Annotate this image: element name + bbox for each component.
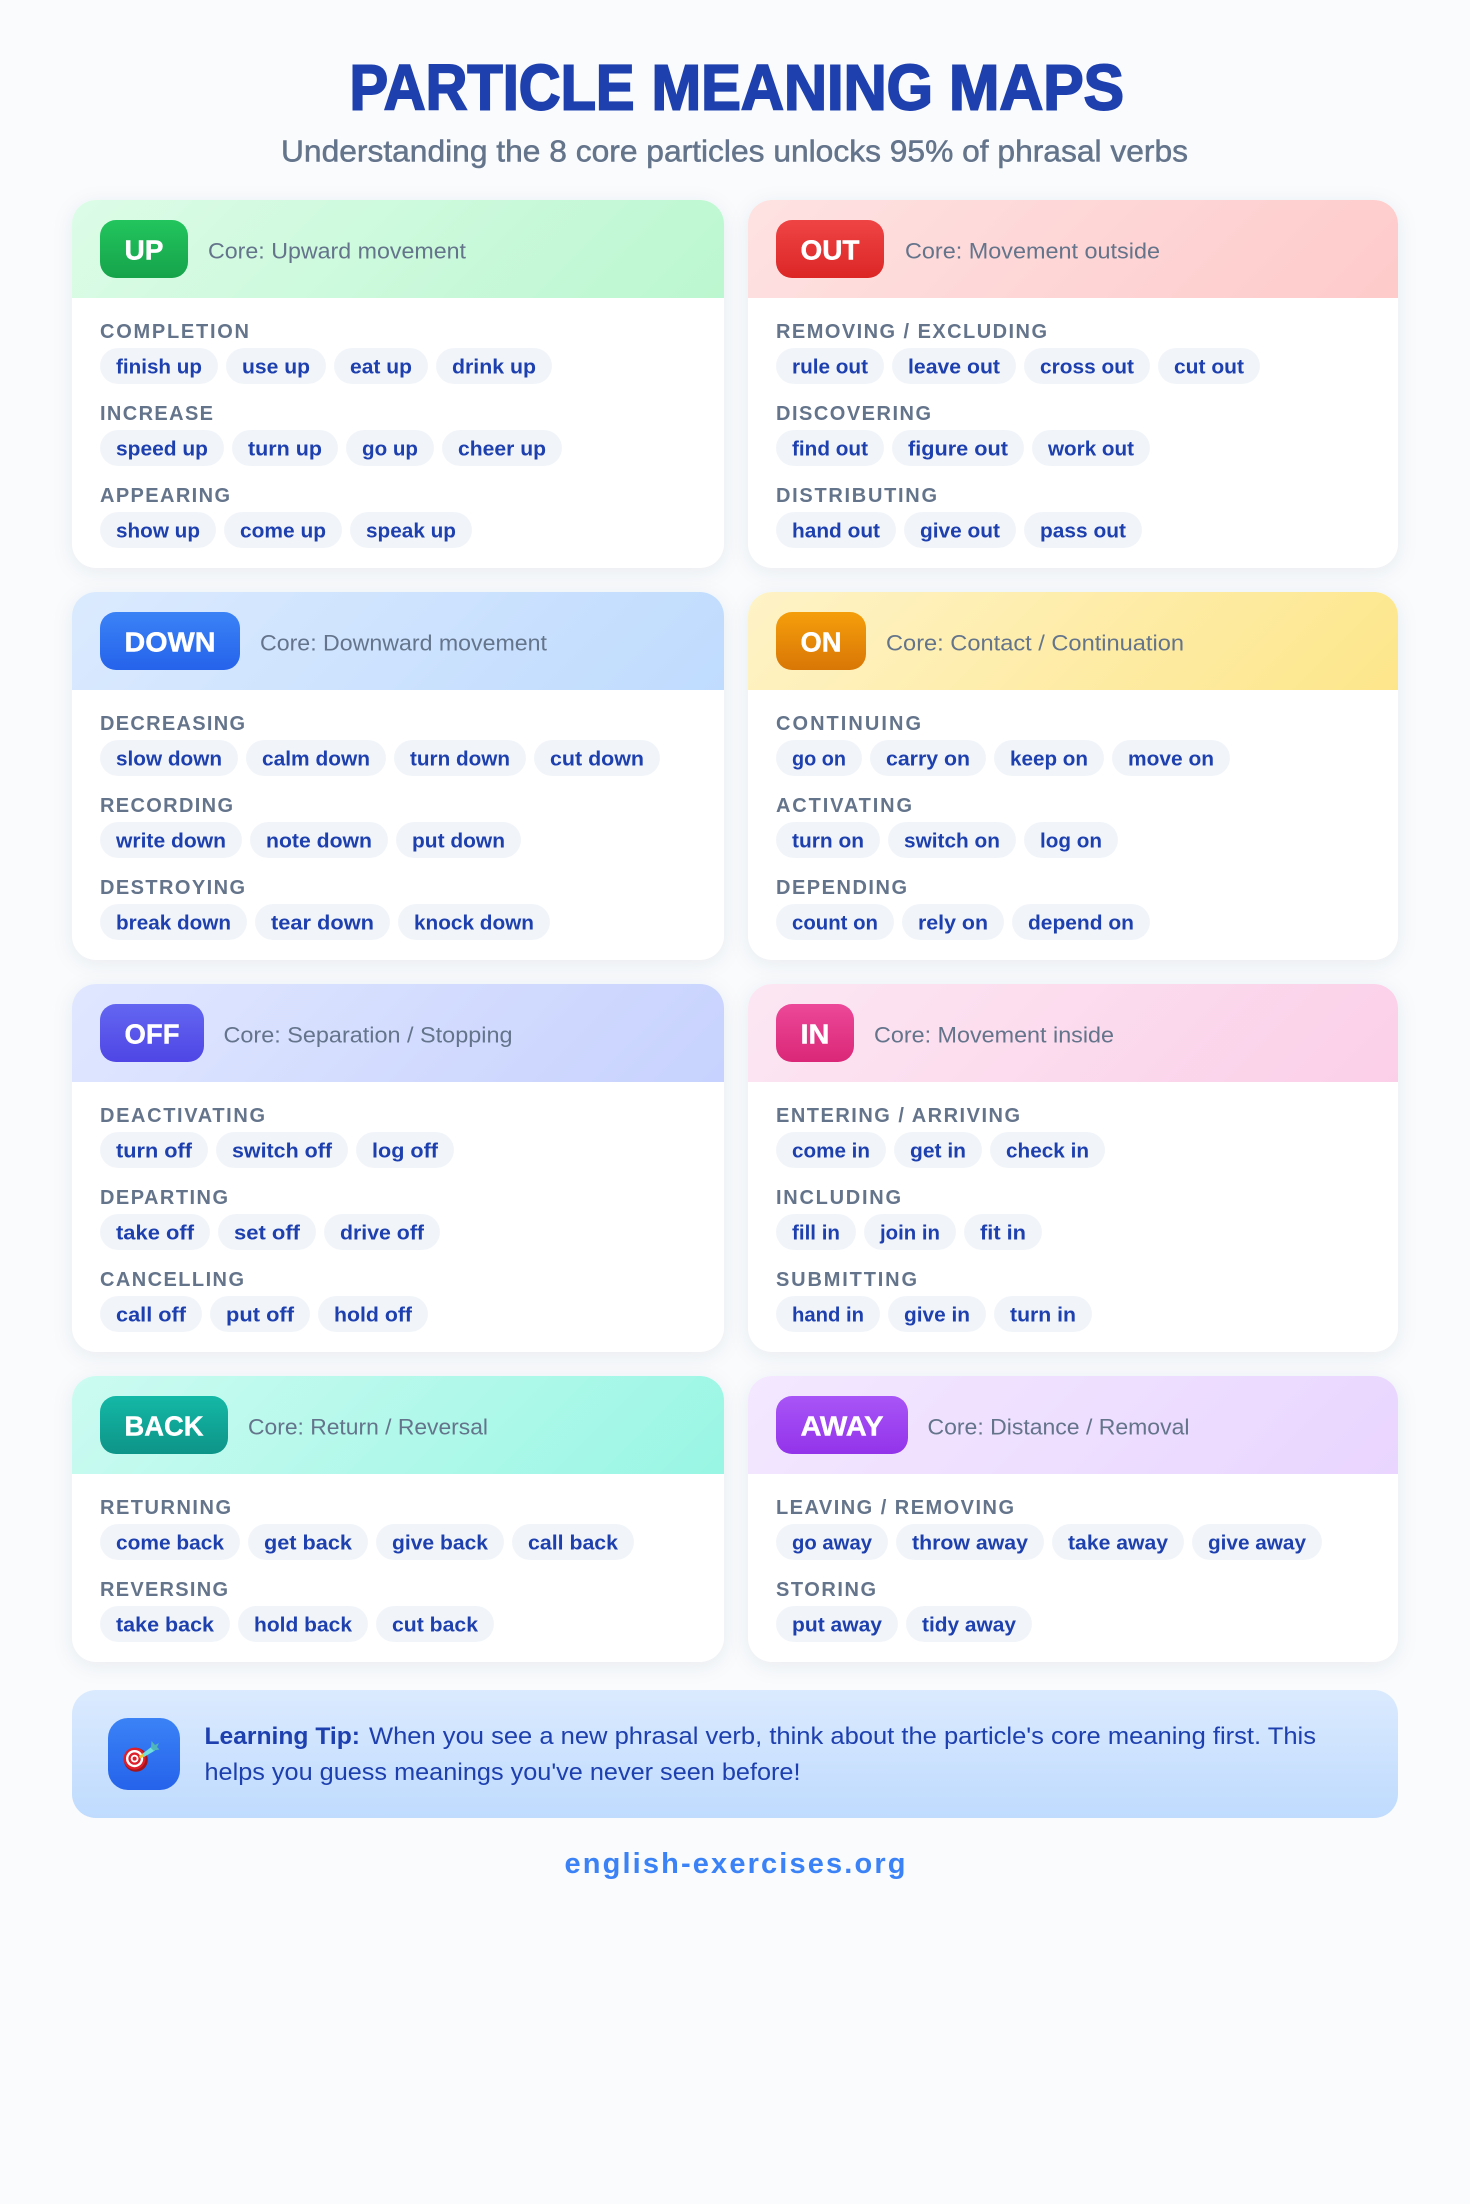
section: leaving / removing: go away bbox=[792, 1532, 873, 1554]
section: including: INCLUDING bbox=[776, 1187, 901, 1209]
section: entering / arriving: ENTERING / ARRIVING bbox=[776, 1105, 1020, 1127]
header: UP bbox=[72, 200, 724, 298]
section: returning bbox=[100, 1497, 634, 1560]
section: depending: count on bbox=[792, 912, 878, 934]
section: activating: log on bbox=[1040, 830, 1102, 852]
section: decreasing: cut down bbox=[550, 748, 644, 770]
tip text: Learning Tip: bbox=[204, 1723, 360, 1750]
section: appearing: APPEARING bbox=[100, 485, 230, 507]
section: submitting: give in bbox=[904, 1304, 970, 1326]
icon: target with dart bbox=[108, 1718, 180, 1790]
section: deactivating: DEACTIVATING bbox=[100, 1105, 265, 1127]
section: leaving / removing: throw away bbox=[912, 1532, 1029, 1554]
section: appearing: speak up bbox=[366, 520, 456, 542]
section: storing bbox=[776, 1579, 1032, 1642]
section: depending bbox=[776, 877, 1150, 940]
header: ON: Core: Contact / Continuation bbox=[886, 630, 1184, 656]
section: deactivating: log off bbox=[372, 1140, 438, 1162]
section: recording: write down bbox=[115, 830, 226, 852]
section: cancelling: put off bbox=[226, 1304, 294, 1326]
section: discovering: find out bbox=[792, 438, 868, 460]
section: continuing: CONTINUING bbox=[776, 713, 921, 735]
section: appearing: come up bbox=[240, 520, 326, 542]
section: completion: use up bbox=[242, 356, 310, 378]
section: continuing: go on bbox=[792, 748, 846, 770]
section: recording: note down bbox=[266, 830, 372, 852]
callout: learning tip bbox=[72, 1690, 1398, 1818]
header: BACK: BACK bbox=[124, 1410, 204, 1442]
title: MEANING bbox=[652, 52, 933, 124]
section: entering / arriving: check in bbox=[1006, 1140, 1089, 1162]
section: activating bbox=[776, 795, 1118, 858]
header: OUT bbox=[748, 200, 1398, 298]
section: distributing: hand out bbox=[792, 520, 880, 542]
section: activating: turn on bbox=[792, 830, 864, 852]
panel: OUT bbox=[748, 200, 1398, 568]
header: OFF bbox=[72, 984, 724, 1082]
section: reversing: take back bbox=[116, 1614, 215, 1636]
section: departing: DEPARTING bbox=[100, 1187, 228, 1209]
header: IN bbox=[748, 984, 1398, 1082]
section: continuing: keep on bbox=[1010, 748, 1088, 770]
section: deactivating bbox=[100, 1105, 454, 1168]
section: decreasing: slow down bbox=[116, 748, 222, 770]
section: depending: DEPENDING bbox=[776, 877, 907, 899]
section: removing / excluding: leave out bbox=[908, 356, 1000, 378]
section: depending: depend on bbox=[1028, 912, 1134, 934]
section: activating: switch on bbox=[904, 830, 1000, 852]
header: BACK: Core: Return / Reversal bbox=[248, 1414, 488, 1440]
title bbox=[350, 52, 1124, 124]
section: storing: put away bbox=[792, 1614, 883, 1636]
section: continuing bbox=[776, 713, 1230, 776]
section: cancelling: call off bbox=[116, 1304, 186, 1326]
section: reversing bbox=[100, 1579, 494, 1642]
header: UP: UP bbox=[124, 234, 164, 266]
section: departing bbox=[100, 1187, 440, 1250]
section: completion: COMPLETION bbox=[100, 321, 249, 343]
section: completion: drink up bbox=[452, 356, 536, 378]
section: cancelling: CANCELLING bbox=[100, 1269, 244, 1291]
section: returning: give back bbox=[392, 1532, 489, 1554]
section: leaving / removing: take away bbox=[1068, 1532, 1169, 1554]
section: decreasing: calm down bbox=[262, 748, 370, 770]
section: destroying: knock down bbox=[414, 912, 534, 934]
section: completion: finish up bbox=[116, 356, 202, 378]
section: deactivating: turn off bbox=[116, 1140, 192, 1162]
section: continuing: carry on bbox=[886, 748, 970, 770]
section: cancelling bbox=[100, 1269, 428, 1332]
section: increase: go up bbox=[362, 438, 418, 460]
section: discovering: figure out bbox=[908, 438, 1008, 460]
section: returning: RETURNING bbox=[100, 1497, 231, 1519]
panel: BACK bbox=[72, 1376, 724, 1662]
section: destroying: DESTROYING bbox=[100, 877, 245, 899]
section: decreasing: DECREASING bbox=[100, 713, 245, 735]
section: increase: INCREASE bbox=[100, 403, 213, 425]
panel: OFF bbox=[72, 984, 724, 1352]
section: appearing bbox=[100, 485, 472, 548]
section: continuing: move on bbox=[1128, 748, 1214, 770]
tip text: helps you guess meanings you've never seen before! bbox=[204, 1759, 800, 1786]
section: entering / arriving: come in bbox=[792, 1140, 870, 1162]
section: removing / excluding: cross out bbox=[1040, 356, 1134, 378]
section: increase: turn up bbox=[248, 438, 322, 460]
section: increase: cheer up bbox=[458, 438, 546, 460]
section: destroying: tear down bbox=[271, 912, 374, 934]
header: OFF: OFF bbox=[124, 1018, 180, 1050]
title: PARTICLE bbox=[350, 52, 634, 124]
section: departing: take off bbox=[116, 1222, 194, 1244]
header: DOWN: Core: Downward movement bbox=[260, 630, 547, 656]
section: returning: come back bbox=[116, 1532, 225, 1554]
section: distributing: pass out bbox=[1040, 520, 1126, 542]
section: storing: STORING bbox=[776, 1579, 876, 1601]
section: entering / arriving: get in bbox=[910, 1140, 966, 1162]
section: including: fit in bbox=[980, 1222, 1026, 1244]
section: removing / excluding bbox=[776, 321, 1260, 384]
section: removing / excluding: rule out bbox=[792, 356, 868, 378]
section: departing: set off bbox=[234, 1222, 300, 1244]
section: departing: drive off bbox=[340, 1222, 424, 1244]
header: OUT: Core: Movement outside bbox=[905, 238, 1160, 264]
section: recording: RECORDING bbox=[100, 795, 233, 817]
section: leaving / removing: LEAVING / REMOVING bbox=[776, 1497, 1014, 1519]
section: discovering bbox=[776, 403, 1150, 466]
section: increase bbox=[100, 403, 562, 466]
panel: AWAY bbox=[748, 1376, 1398, 1662]
section: entering / arriving bbox=[776, 1105, 1105, 1168]
section: reversing: cut back bbox=[392, 1614, 479, 1636]
section: submitting: hand in bbox=[792, 1304, 864, 1326]
section: submitting bbox=[776, 1269, 1092, 1332]
header: BACK bbox=[72, 1376, 724, 1474]
header: IN: IN bbox=[800, 1018, 830, 1050]
section: leaving / removing: give away bbox=[1208, 1532, 1307, 1554]
section: deactivating: switch off bbox=[232, 1140, 332, 1162]
section: including: fill in bbox=[792, 1222, 840, 1244]
section: activating: ACTIVATING bbox=[776, 795, 912, 817]
subtitle: Understanding the 8 core particles unlocks 95% of phrasal verbs bbox=[281, 134, 1188, 168]
header: UP: Core: Upward movement bbox=[208, 238, 466, 264]
section: recording bbox=[100, 795, 521, 858]
section: including bbox=[776, 1187, 1042, 1250]
section: removing / excluding: cut out bbox=[1174, 356, 1244, 378]
section: recording: put down bbox=[412, 830, 505, 852]
header: ON: ON bbox=[800, 626, 842, 658]
section: reversing: hold back bbox=[254, 1614, 353, 1636]
panel: UP bbox=[72, 200, 724, 568]
section: submitting: SUBMITTING bbox=[776, 1269, 917, 1291]
section: reversing: REVERSING bbox=[100, 1579, 228, 1601]
section: cancelling: hold off bbox=[334, 1304, 412, 1326]
header: ON bbox=[748, 592, 1398, 690]
header: DOWN bbox=[72, 592, 724, 690]
section: including: join in bbox=[879, 1222, 940, 1244]
section: completion bbox=[100, 321, 552, 384]
header: OUT: OUT bbox=[800, 234, 860, 266]
title: MAPS bbox=[949, 52, 1124, 124]
section: decreasing: turn down bbox=[410, 748, 510, 770]
section: decreasing bbox=[100, 713, 660, 776]
header: AWAY: AWAY bbox=[800, 1410, 884, 1442]
panel: ON bbox=[748, 592, 1398, 960]
section: completion: eat up bbox=[350, 356, 412, 378]
section: depending: rely on bbox=[918, 912, 988, 934]
header: IN: Core: Movement inside bbox=[874, 1022, 1114, 1048]
section: increase: speed up bbox=[116, 438, 208, 460]
section: distributing: give out bbox=[920, 520, 1000, 542]
section: leaving / removing bbox=[776, 1497, 1322, 1560]
footer: website: english-exercises.org bbox=[564, 1848, 906, 1880]
tip text: When you see a new phrasal verb, think about the particle's core meaning first. This bbox=[369, 1723, 1316, 1750]
section: discovering: work out bbox=[1047, 438, 1134, 460]
header: AWAY: Core: Distance / Removal bbox=[928, 1414, 1190, 1440]
header: DOWN: DOWN bbox=[124, 626, 216, 658]
section: distributing bbox=[776, 485, 1142, 548]
header: OFF: Core: Separation / Stopping bbox=[224, 1022, 512, 1048]
section: distributing: DISTRIBUTING bbox=[776, 485, 937, 507]
section: returning: call back bbox=[528, 1532, 619, 1554]
section: destroying: break down bbox=[116, 912, 231, 934]
tip text bbox=[204, 1723, 1316, 1786]
section: removing / excluding: REMOVING / EXCLUDING bbox=[776, 321, 1047, 343]
section: storing: tidy away bbox=[922, 1614, 1017, 1636]
section: submitting: turn in bbox=[1010, 1304, 1076, 1326]
panel: IN bbox=[748, 984, 1398, 1352]
panel: DOWN bbox=[72, 592, 724, 960]
header: AWAY bbox=[748, 1376, 1398, 1474]
section: returning: get back bbox=[264, 1532, 353, 1554]
section: discovering: DISCOVERING bbox=[776, 403, 931, 425]
section: destroying bbox=[100, 877, 550, 940]
section: appearing: show up bbox=[116, 520, 200, 542]
